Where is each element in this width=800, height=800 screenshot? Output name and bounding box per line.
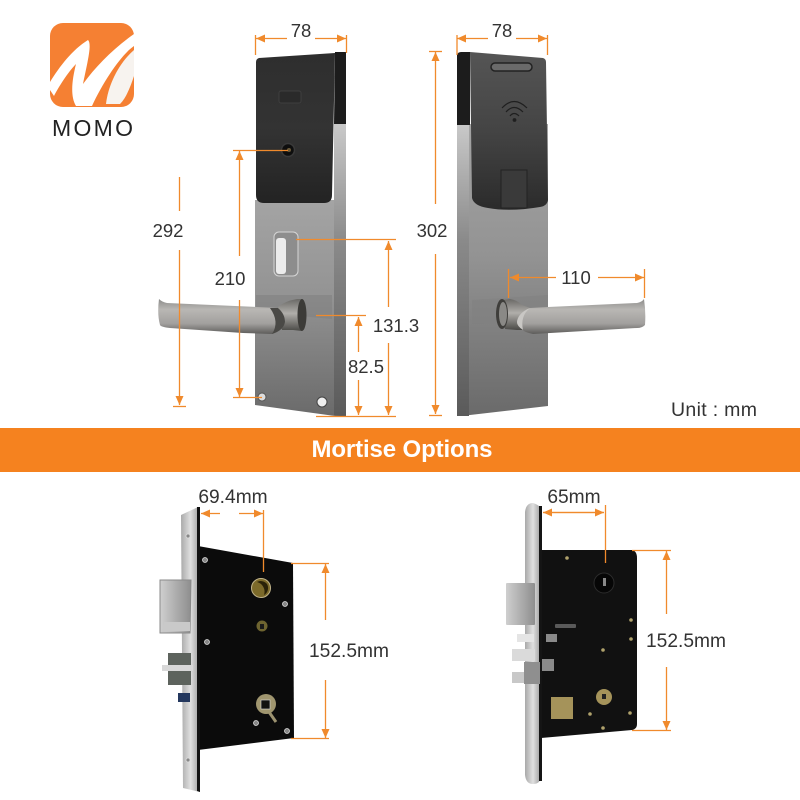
latch (162, 653, 193, 685)
right lock back view (457, 52, 645, 416)
cylinder cam (594, 573, 614, 593)
screws (186, 534, 290, 762)
dimension 78: 78 (492, 20, 512, 41)
unit note: Unit : mm (671, 399, 757, 421)
brass hub (596, 689, 612, 705)
plate side strip (334, 124, 346, 417)
faceplate (181, 507, 200, 792)
faceplate dark edge (197, 507, 200, 792)
case slots (542, 624, 576, 671)
left mortise lock (160, 507, 294, 792)
privacy indicator window (274, 232, 298, 276)
lever end shading (270, 308, 285, 334)
latches (512, 634, 540, 684)
lock plate (457, 124, 548, 416)
right mortise lock (506, 503, 637, 784)
dimension 302: 302 (417, 220, 447, 241)
brass square (551, 697, 573, 719)
reader cover (470, 52, 548, 210)
left lock front view (158, 52, 346, 417)
handle rose shading (256, 295, 332, 319)
right mortise dimensions (543, 487, 726, 730)
plate side strip (457, 124, 469, 416)
handle rose shading (472, 295, 548, 324)
main bolt (506, 583, 535, 625)
knob (496, 299, 530, 330)
dimension 78 (457, 20, 548, 55)
lever handle (158, 299, 285, 334)
dimension 82.5 (316, 316, 396, 416)
blue deadlatch (178, 693, 190, 702)
knob (278, 299, 306, 331)
card slot (491, 63, 532, 71)
dimensions: left lock (153, 20, 419, 416)
key hole (282, 144, 294, 156)
dimension 210: 210 (215, 268, 245, 289)
cylinder hole (252, 578, 270, 598)
logo: MOMO (50, 23, 134, 141)
logo mark (50, 23, 134, 107)
brand badge (279, 91, 301, 103)
banner heading: Mortise Options (312, 436, 492, 463)
square spindle (256, 620, 268, 632)
dimension 78: 78 (291, 20, 311, 41)
icon: wireless (502, 102, 527, 121)
dimension 292: 292 (153, 220, 183, 241)
dimension 110: 110 (561, 267, 591, 288)
left mortise dimensions (198, 487, 389, 738)
dimension 69.4mm: 69.4mm (198, 487, 268, 508)
dimension 69.4mm (198, 487, 268, 572)
dimension 152.5mm: 152.5mm (646, 631, 726, 652)
logo wordmark: MOMO (52, 115, 133, 141)
main bolt (160, 580, 191, 633)
lever handle (517, 299, 645, 334)
screws (258, 393, 327, 407)
black left edge (457, 52, 470, 125)
screws (565, 556, 633, 730)
dimension 65mm: 65mm (547, 487, 601, 508)
battery cover (501, 170, 527, 208)
lock plate (255, 200, 346, 417)
faceplate (525, 503, 541, 784)
lever end shading (517, 308, 530, 330)
case body (198, 546, 294, 750)
black card reader cover (256, 53, 335, 203)
case body (541, 550, 637, 738)
dimension 110 (508, 267, 644, 298)
dimension 152.5mm: 152.5mm (309, 641, 389, 662)
section banner (0, 428, 800, 472)
dimensions: right lock (417, 20, 644, 416)
dimension 131.3: 131.3 (373, 315, 419, 336)
dimension 78 (256, 20, 346, 55)
brass hub (256, 694, 276, 722)
black right edge (334, 52, 346, 124)
faceplate dark edge (539, 506, 542, 781)
dimension 65mm (543, 487, 606, 563)
dimension 82.5: 82.5 (348, 356, 384, 377)
